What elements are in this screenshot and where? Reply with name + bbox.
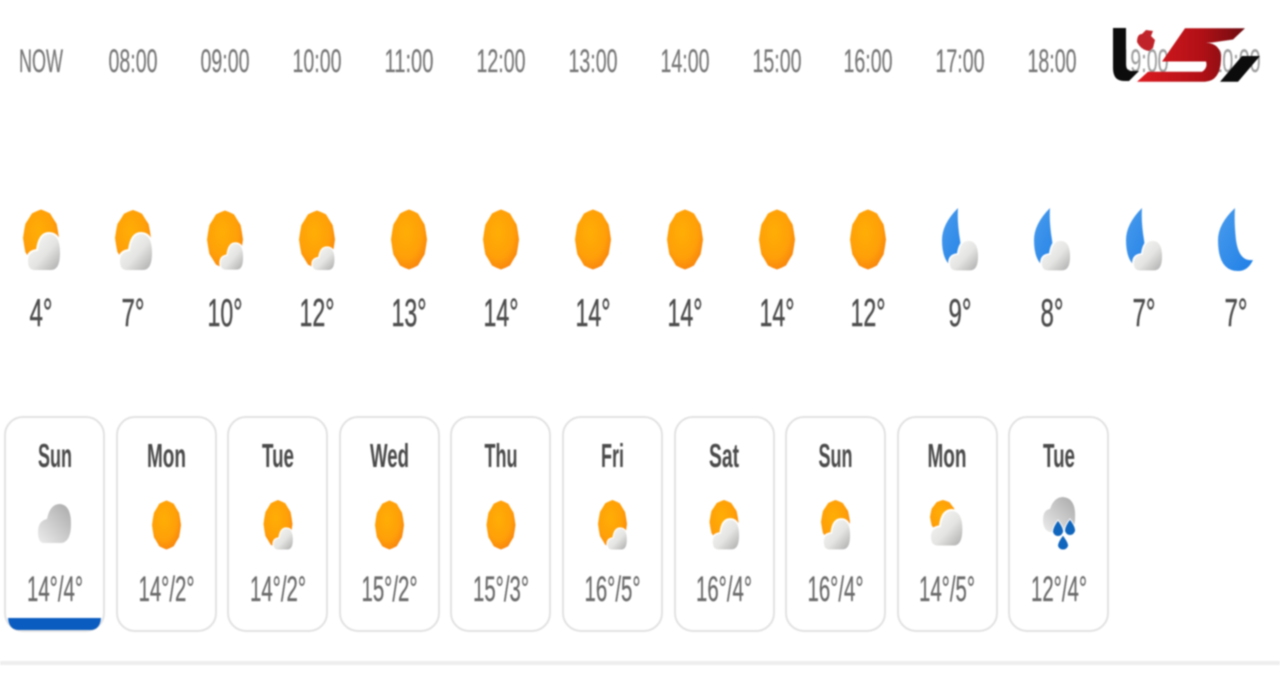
icon: sun [667, 210, 703, 270]
icon: sun with small cloud [207, 210, 244, 270]
icon: sun [759, 210, 795, 270]
card: Sunday (selected): Sun [38, 437, 72, 474]
card: Monday: Mon [147, 437, 186, 474]
hourly time labels: 18:00 [1028, 43, 1076, 79]
hourly temperatures: 10° [208, 292, 242, 335]
card: Sunday (selected) [5, 417, 104, 631]
icon: sun with small cloud [299, 210, 335, 271]
hourly time labels: 14:00 [660, 43, 710, 79]
icon: sun [575, 210, 611, 270]
card: Tuesday: 14°/2° [250, 570, 306, 609]
card: Sunday: Sun [818, 437, 852, 474]
card: Monday: 14°/2° [138, 570, 194, 609]
card: Thursday [451, 417, 550, 631]
hourly time labels: NOW [19, 43, 63, 79]
hourly temperatures: 14° [760, 292, 794, 335]
panel: daily forecast cards [5, 417, 1108, 631]
icon: moon with cloud [1034, 208, 1071, 271]
icon: sun [483, 210, 519, 270]
card: Thursday: 15°/3° [473, 570, 529, 609]
hourly temperatures: 14° [576, 292, 610, 335]
hourly temperatures: 7° [1224, 292, 1248, 335]
hourly temperatures: 14° [484, 292, 518, 335]
card: Sunday (selected): 14°/4° [27, 570, 83, 609]
card: Saturday: Sat [709, 437, 739, 474]
card: Tuesday (rain): Tue [1043, 437, 1075, 474]
hourly time labels [19, 43, 1260, 79]
card: Saturday [675, 417, 774, 631]
card: Sunday [786, 417, 885, 631]
hourly temperatures: 13° [392, 292, 426, 335]
card: Friday: 16°/5° [584, 570, 640, 609]
card: Sunday: 16°/4° [808, 570, 864, 609]
hourly temperatures: 14° [668, 292, 702, 335]
card: Tuesday [228, 417, 327, 631]
logo [1113, 28, 1260, 82]
card: Friday: Fri [601, 437, 624, 474]
card: Saturday: 16°/4° [696, 570, 752, 609]
icon: moon with cloud [942, 208, 979, 271]
hourly time labels: 17:00 [936, 43, 984, 79]
card: Thursday: Thu [484, 437, 518, 474]
card: Tuesday (rain) [1009, 417, 1108, 631]
hourly time labels: 16:00 [844, 43, 892, 79]
hourly temperatures: 7° [122, 292, 144, 335]
hourly time labels: 09:00 [200, 43, 250, 79]
hourly temperatures: 12° [850, 292, 886, 335]
icon: sun [391, 210, 427, 270]
hourly time labels: 11:00 [384, 43, 434, 79]
card: Tuesday: Tue [262, 437, 294, 474]
icon: sun with cloud [23, 210, 61, 271]
card: Monday: 14°/5° [919, 570, 975, 609]
card: Monday [117, 417, 216, 631]
hourly time labels: 15:00 [752, 43, 802, 79]
icon: moon [1218, 208, 1253, 271]
hourly temperatures: 8° [1040, 292, 1064, 335]
icon: moon with cloud [1126, 208, 1163, 271]
logo letter L [1113, 28, 1139, 81]
hourly time labels: 12:00 [476, 43, 526, 79]
hourly time labels: 19:00 [1120, 43, 1168, 79]
logo globe [1137, 30, 1157, 51]
card: Tuesday (rain): 12°/4° [1031, 570, 1087, 609]
icon: sun with cloud [115, 210, 153, 271]
hourly temperatures [30, 292, 1248, 335]
hourly temperatures: 9° [948, 292, 972, 335]
card: Monday [898, 417, 997, 631]
card: Wednesday [340, 417, 439, 631]
logo slash [1220, 56, 1260, 82]
hourly weather icons [23, 208, 1253, 271]
hourly temperatures: 12° [300, 292, 334, 335]
hourly time labels: 10:00 [292, 43, 342, 79]
hourly time labels: 13:00 [568, 43, 618, 79]
icon: sun [850, 210, 886, 270]
logo letter S [1137, 28, 1245, 82]
card: Wednesday: 15°/2° [362, 570, 418, 609]
hourly temperatures: 4° [30, 292, 52, 335]
card: Wednesday: Wed [370, 437, 409, 474]
hourly temperatures: 7° [1132, 292, 1156, 335]
hourly time labels: 08:00 [108, 43, 158, 79]
card: Monday: Mon [928, 437, 966, 474]
card: Friday [563, 417, 662, 631]
